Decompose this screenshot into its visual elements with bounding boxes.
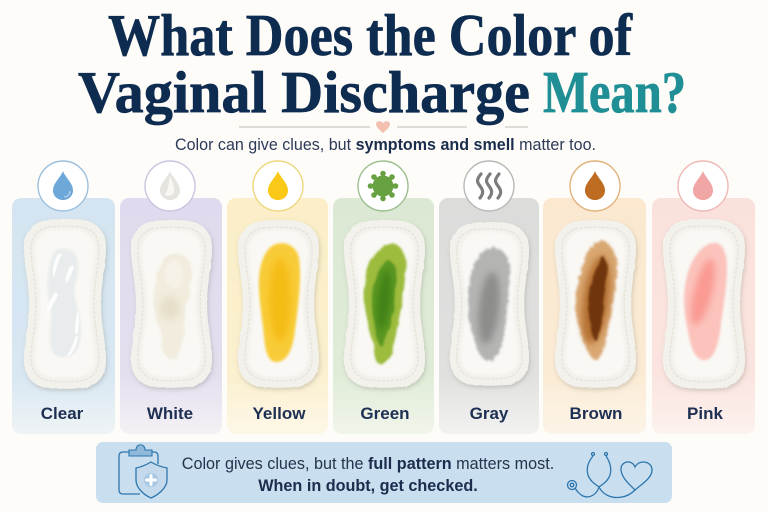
banner background <box>96 442 672 503</box>
subtitle: Color can give clues, but symptoms and smell matter too. <box>175 136 596 154</box>
label: Clear <box>41 404 84 423</box>
pad <box>555 220 636 388</box>
callout text: Color gives clues, but the full pattern matters most. <box>182 455 554 473</box>
panel: gray <box>439 198 539 434</box>
stain: clear <box>47 248 81 357</box>
icon: white droplet <box>145 161 195 211</box>
pad <box>663 219 745 389</box>
card background <box>333 198 434 434</box>
callout banner <box>96 442 672 503</box>
stain: green <box>364 244 406 365</box>
card background <box>439 198 539 434</box>
label: Brown <box>570 404 622 423</box>
label: Yellow <box>253 404 306 423</box>
panel: yellow <box>227 198 328 434</box>
icon: stethoscope with heart <box>568 452 652 498</box>
icon: yellow droplet <box>253 161 303 211</box>
card background <box>652 198 755 434</box>
pad <box>238 220 319 388</box>
callout text <box>182 455 554 495</box>
title <box>78 2 686 125</box>
icon: green germ <box>358 161 408 211</box>
card background <box>543 198 646 434</box>
icon: clear droplet <box>38 161 88 211</box>
callout text: When in doubt, get checked. <box>258 477 478 495</box>
label: White <box>147 404 193 423</box>
icon: pink droplet <box>678 161 728 211</box>
title: What Does the Color of <box>108 2 633 68</box>
pad <box>344 220 425 388</box>
panel: green <box>333 198 434 434</box>
icon: brown droplet <box>570 161 620 211</box>
title: Vaginal Discharge <box>78 59 530 125</box>
pad <box>450 222 529 386</box>
panel: clear <box>12 198 115 434</box>
card background <box>227 198 328 434</box>
label: Gray <box>470 404 509 423</box>
pad <box>24 219 106 389</box>
stain: white <box>154 254 191 359</box>
stain: pink <box>684 243 727 360</box>
divider with heart <box>239 121 528 133</box>
card background <box>120 198 222 434</box>
panel: pink <box>652 198 755 434</box>
label: Green <box>360 404 410 423</box>
title: Mean? <box>543 59 686 125</box>
icon: clipboard with shield <box>119 445 167 498</box>
stain: gray <box>468 248 510 361</box>
label: Pink <box>687 404 723 423</box>
stain: brown <box>575 240 617 360</box>
panel: brown <box>543 198 646 434</box>
panel: white <box>120 198 222 434</box>
pad <box>131 220 212 388</box>
stain: yellow <box>259 243 300 362</box>
card background <box>12 198 115 434</box>
icon: gray odor waves <box>464 161 514 211</box>
